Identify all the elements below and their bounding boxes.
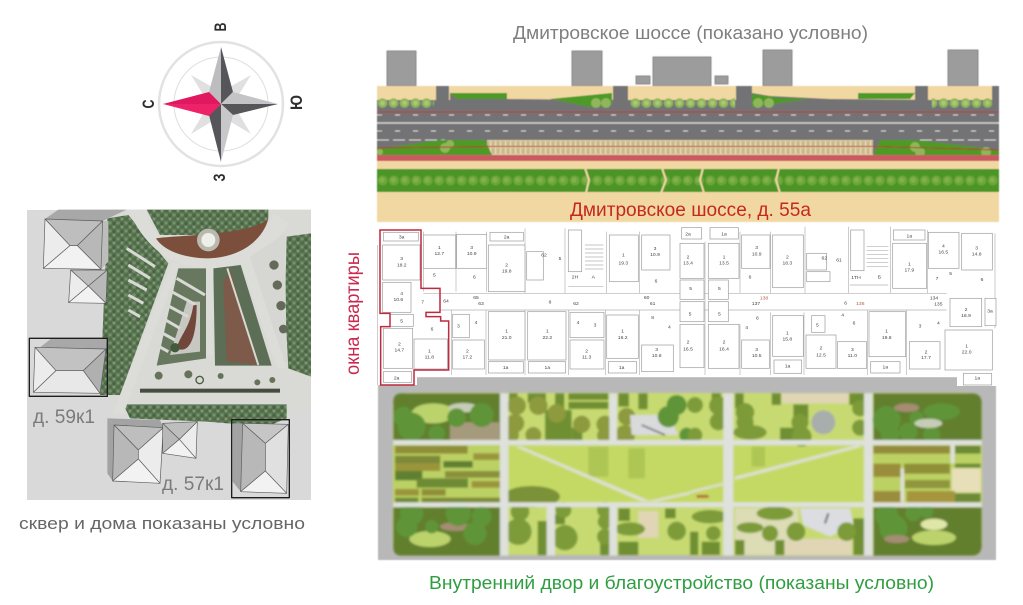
carriageway — [377, 100, 999, 155]
compass rose — [139, 22, 306, 182]
plan east half: 1ТН — [851, 275, 861, 281]
plan east half: 62 — [822, 256, 827, 262]
top tree rows — [377, 97, 992, 109]
plan east half — [680, 227, 996, 385]
plan east half: 12.5 — [816, 352, 826, 358]
site plan background — [27, 210, 311, 500]
compass diagonal rays — [191, 75, 251, 134]
plan east half: 1 — [786, 330, 789, 336]
plan east half: 1a — [721, 232, 727, 238]
plan east half: 136 — [856, 301, 865, 307]
plan east half: 6 — [756, 316, 759, 322]
plan west half: 3 — [654, 246, 657, 252]
plan east half: 18.3 — [782, 260, 792, 266]
apartment outline — [380, 230, 449, 385]
plan east half: 10.9 — [752, 252, 762, 258]
plan east half: 15.8 — [782, 336, 792, 342]
plan west half: 2a — [504, 235, 510, 241]
plan east half: 18.9 — [961, 313, 971, 319]
plan west half: 10.9 — [650, 252, 660, 258]
plan west half: 64 — [443, 298, 449, 304]
plan west half: 1 — [622, 253, 625, 259]
plan east half: 1 — [885, 328, 888, 334]
plan west half: 4 — [475, 320, 478, 326]
lower sand — [377, 192, 999, 222]
compass letters: Ю — [287, 95, 306, 110]
plan east half: 2 — [687, 254, 690, 260]
plan west half: 1a — [503, 365, 509, 371]
paving stripes — [127, 248, 205, 352]
compass letters — [139, 22, 306, 182]
plan east half: 4 — [841, 312, 844, 318]
plan west half: 2 — [585, 348, 588, 354]
right paving with round planters — [250, 233, 287, 368]
plan west half: 7 — [421, 300, 424, 306]
plan west half: 2 — [398, 342, 401, 348]
plan east half: 5 — [689, 312, 692, 318]
plan east half: 2a — [685, 232, 691, 238]
plan east half: 16.4 — [719, 346, 729, 352]
curb shapes — [450, 93, 620, 100]
plan west half: 18.2 — [397, 262, 407, 268]
plan west half: 11.8 — [425, 354, 434, 360]
plan west half: 4 — [577, 320, 580, 326]
plan east half: 1 — [723, 254, 726, 260]
pink cycle lane — [377, 155, 999, 162]
plan east half: 3 — [755, 245, 758, 251]
plan east half: 1a — [975, 376, 980, 382]
plan east half: 3 — [755, 347, 758, 353]
compass outer rings — [159, 42, 283, 166]
garden wedge left — [157, 268, 206, 366]
plan east half: 5 — [718, 286, 721, 292]
plan east half: 19.8 — [882, 335, 892, 341]
green tree band — [377, 169, 999, 192]
plan east half: 22.0 — [962, 350, 972, 356]
house 57k1 — [232, 420, 289, 498]
plan east half: 16.5 — [938, 250, 948, 256]
compass letters: С — [139, 100, 158, 108]
plan east half: 5 — [816, 322, 819, 328]
plan west half: 3 — [457, 324, 460, 330]
green wedges — [450, 93, 915, 107]
plan east half: 6 — [981, 277, 984, 283]
garden wedge right — [213, 265, 272, 366]
panel: square site plan — [27, 210, 311, 500]
plan east half: 10.5 — [752, 353, 762, 359]
plan east half: 11.0 — [848, 353, 857, 359]
south-centre east patches — [690, 507, 865, 556]
plan west half: 16.2 — [618, 335, 628, 341]
plan east half: 137 — [752, 301, 760, 307]
plan east half: 16.5 — [683, 346, 693, 352]
plan east half: 1 — [908, 262, 911, 268]
caption: square note: сквер и дома показаны условно — [19, 514, 305, 533]
plan west half: 12.7 — [434, 251, 444, 257]
plan west half: 8 — [549, 299, 552, 305]
floor plan sheet — [377, 224, 1000, 377]
plan west half: 3 — [594, 323, 597, 329]
north-east garden — [873, 393, 982, 444]
plan west half: 1a — [545, 365, 550, 371]
compass letters: В — [211, 22, 230, 32]
diagonal walkways — [113, 262, 179, 414]
plan west half: 11.3 — [582, 354, 592, 360]
green strips — [100, 215, 168, 395]
plan west half: 63 — [478, 301, 484, 307]
plan east half: 14.8 — [972, 252, 982, 258]
plan west half: 3 — [655, 347, 658, 353]
plan east half: 13.5 — [719, 260, 729, 266]
plan east half: 5 — [949, 271, 952, 277]
plan west half: 5 — [559, 256, 562, 262]
east paths — [690, 393, 982, 556]
panel: apartment floor plan — [377, 224, 1000, 386]
plan west half: 6 — [473, 274, 476, 280]
plan east half: 61 — [836, 258, 842, 264]
lower planters — [155, 370, 275, 385]
plan west half: 22.2 — [542, 335, 552, 341]
plan west half: 5 — [400, 318, 403, 324]
plan west half: 4 — [400, 291, 403, 297]
road markings — [377, 115, 999, 140]
plan east half: 4 — [937, 320, 940, 326]
plan east half: 13.4 — [683, 260, 693, 266]
plan west half: 10.9 — [467, 251, 477, 257]
plan east half: 1a — [785, 364, 791, 370]
plan west half: 5 — [433, 273, 436, 279]
plan east half: 2 — [687, 339, 690, 345]
plan east half: 4 — [745, 325, 748, 331]
plan east half: 4 — [942, 244, 945, 250]
cross streets — [436, 86, 999, 101]
plan west half: 21.0 — [502, 335, 512, 341]
plan east half: 6 — [853, 320, 856, 326]
plan east half: 17.7 — [921, 355, 931, 361]
east planting stripes — [873, 445, 981, 503]
west planting stripes — [393, 445, 500, 503]
sand sidewalk — [377, 86, 999, 101]
plan west half: 1 — [546, 328, 549, 334]
house 59k1 — [29, 338, 107, 396]
plan east half: 2 — [786, 254, 789, 260]
north-west garden — [393, 393, 500, 442]
plan east half: 3 — [919, 324, 922, 330]
house upper left — [43, 210, 127, 269]
plan east half: Б — [878, 274, 882, 280]
south-west garden — [393, 501, 500, 556]
sand strip — [377, 161, 999, 169]
plan west half: 2a — [394, 375, 400, 381]
plan west half: 14.7 — [394, 348, 404, 354]
tram track — [487, 140, 873, 155]
plan west half: 3 — [400, 256, 403, 262]
plan east half: 1a — [907, 233, 912, 239]
plan west half: 2 — [466, 348, 469, 354]
south-centre patches — [505, 502, 686, 555]
plan east half: 5 — [718, 312, 721, 318]
plan east half: 6 — [844, 300, 847, 306]
plan west half: 1 — [621, 328, 624, 334]
plan west half: 1 — [428, 348, 431, 354]
label: house 59k1: д. 59к1 — [33, 407, 95, 428]
plan east half: 135 — [934, 302, 943, 308]
plan east half: 5 — [689, 286, 692, 292]
west paths — [393, 393, 690, 556]
north-centre patches — [504, 393, 694, 445]
brown deck — [156, 218, 268, 258]
house small bottom — [163, 422, 197, 458]
label: apartment windows: окна квартиры — [343, 252, 364, 375]
plan west half: 62 — [541, 253, 547, 259]
compass letters: З — [210, 174, 229, 182]
central lawn east — [690, 445, 863, 502]
plan east half: 3a — [987, 308, 993, 314]
plan west half: 1 — [505, 328, 508, 334]
plan west half: 2Н — [572, 274, 579, 280]
plan east half: 2 — [723, 339, 726, 345]
plan west half: 65 — [473, 295, 479, 301]
green island left — [377, 140, 492, 155]
island trees — [377, 140, 991, 157]
red tram line and road lines — [377, 112, 999, 150]
plan west half: 10.6 — [393, 297, 403, 303]
plan west half: 17.2 — [462, 354, 472, 360]
plan west half: 3a — [399, 235, 405, 241]
label: house 57k1: д. 57к1 — [162, 474, 224, 495]
caption: courtyard note: Внутренний двор и благоустройство (показаны условно) — [429, 573, 934, 593]
east half — [687, 393, 982, 556]
plan east half: 138 — [760, 296, 768, 302]
roadside buildings — [387, 50, 978, 86]
plan west half: 19.3 — [618, 260, 628, 266]
plan west half: 60 — [644, 295, 650, 301]
central lawn west — [503, 447, 690, 507]
green island right — [873, 140, 999, 155]
plan west half — [377, 228, 680, 385]
plan east half: 2 — [925, 349, 928, 355]
plan east half: 134 — [930, 296, 938, 302]
plan east half: 1 — [965, 344, 968, 350]
park paving — [100, 210, 311, 427]
panel: courtyard landscaping — [378, 377, 996, 560]
plan east half: 17.9 — [904, 268, 914, 274]
plan west half: 8 — [651, 315, 654, 321]
plan west half: 4 — [668, 324, 671, 330]
plan west half: 1a — [619, 365, 625, 371]
label: building address: Дмитровское шоссе, д. 55а — [570, 199, 811, 221]
heading: highway: Дмитровское шоссе (показано условно) — [513, 23, 868, 43]
plan east half: 2 — [965, 307, 968, 313]
house bottom centre — [107, 418, 163, 483]
plan west half: 6 — [431, 326, 434, 332]
plan west half: 10.8 — [652, 353, 662, 359]
plan west half: 19.8 — [502, 269, 512, 275]
plaza paving arc — [128, 210, 288, 268]
plan east half: 2 — [820, 346, 823, 352]
footpath breaks — [585, 168, 780, 193]
plan west half: 1 — [438, 245, 441, 251]
plan east half: 7 — [936, 276, 939, 282]
plan west half: 62 — [573, 301, 579, 307]
hedge row — [140, 389, 280, 393]
courtyard lawn — [393, 393, 982, 555]
plan west half: 61 — [650, 301, 656, 307]
plan west half: 6 — [655, 278, 658, 284]
plan west half: 3 — [470, 245, 473, 251]
house second upper left — [69, 270, 107, 303]
west half — [393, 393, 694, 556]
plan west half: А — [592, 274, 596, 280]
plan west half: 2 — [505, 263, 508, 269]
plan east half: 1a — [883, 364, 888, 370]
plan east half: 3 — [851, 347, 854, 353]
south-east garden — [873, 504, 982, 556]
plan east half: 6 — [749, 274, 752, 280]
north-centre east patches — [687, 393, 868, 447]
courtyard paving — [378, 377, 996, 560]
panel: highway plan — [377, 50, 999, 222]
plan east half: 3 — [975, 246, 978, 252]
compass main star — [163, 47, 278, 162]
